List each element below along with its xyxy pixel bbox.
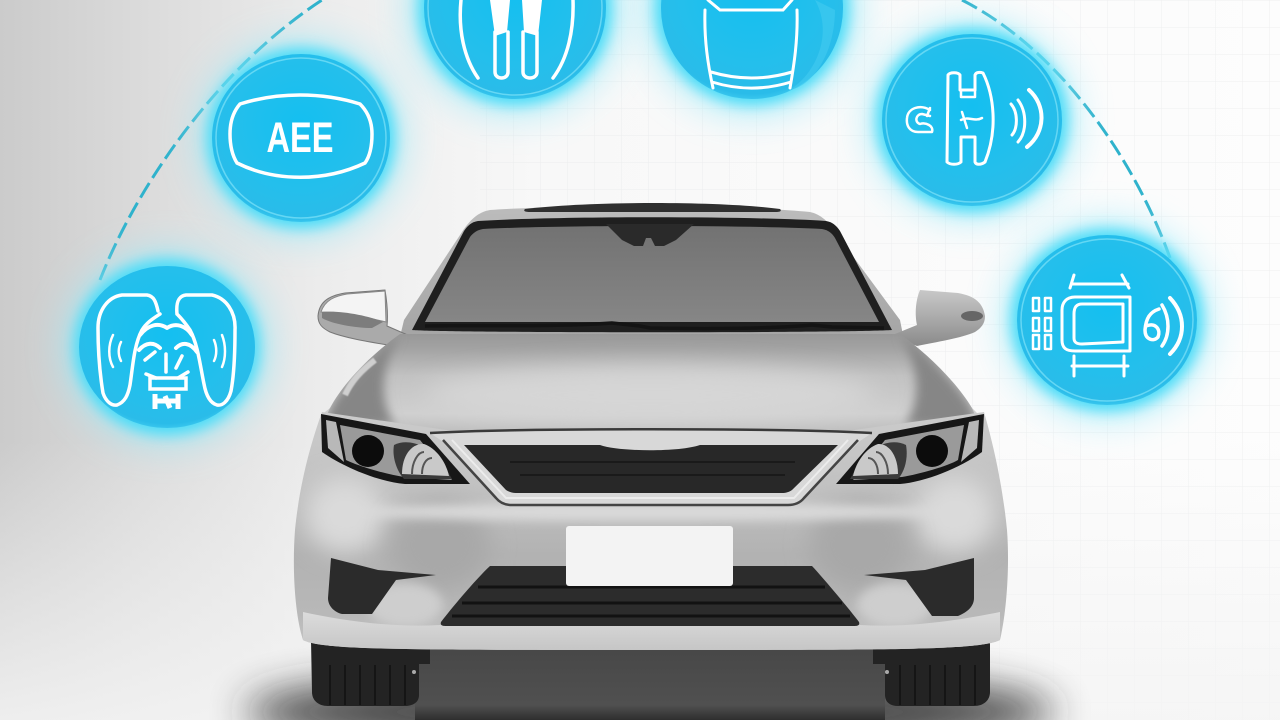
left headlight [321,414,470,484]
icon: car top view badge [644,0,860,116]
icon: steering and sensor badge [63,249,271,445]
right headlight [836,414,984,484]
wheels [311,640,990,706]
icon: AEB badge [197,38,405,238]
right fog lamp [864,558,974,616]
main body [294,412,1008,650]
car [245,203,1055,720]
ground shadow [245,670,1055,720]
grille [430,429,872,505]
dashed arc connecting the icons [100,0,1170,280]
windshield [412,217,892,332]
icon: lane keeping badge [407,0,623,116]
roof [398,206,905,345]
lower intake [441,566,859,626]
icon: AEB badge: AEE [266,114,334,162]
hood [320,334,984,434]
icon: radar scan badge [1003,220,1211,420]
right mirror [890,290,985,346]
left fog lamp [328,558,436,614]
left mirror [318,290,410,345]
icon: door sensor badge [868,20,1076,220]
lower bumper lip [303,612,1000,650]
license plate [566,526,733,586]
